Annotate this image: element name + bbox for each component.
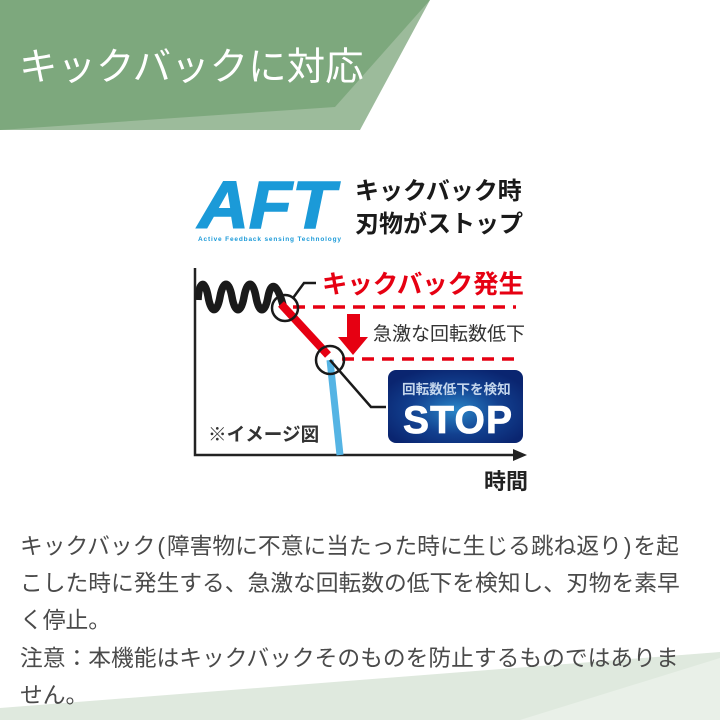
graph axes xyxy=(195,268,527,461)
blue line: blade stop xyxy=(330,360,340,455)
body text: ) xyxy=(624,533,631,559)
down arrow xyxy=(338,314,368,355)
title: キックバックに対応 xyxy=(19,46,364,89)
body text: キックバック 障害物に不意に当たった時に生じる跳ね返り を起 xyxy=(20,533,679,559)
heading: kickback stop: キックバック時 xyxy=(355,178,522,205)
note: image diagram: ※イメージ図 xyxy=(208,424,319,445)
axis label: time: 時間 xyxy=(484,469,528,494)
label: kickback occurs: キックバック発生 xyxy=(322,271,524,299)
dashed threshold lines xyxy=(293,307,522,359)
label: sudden rpm drop: 急激な回転数低下 xyxy=(373,323,525,345)
heading: kickback stop xyxy=(355,178,523,238)
marker circles and leader lines xyxy=(272,283,386,407)
AFT logo: Active Feedback sensing Technology xyxy=(198,236,341,243)
body text: ( xyxy=(157,533,165,559)
waveform: normal rotation xyxy=(198,284,283,310)
body text: せん。 xyxy=(20,682,88,708)
body text: く停止。 xyxy=(20,607,111,633)
stop badge xyxy=(388,370,523,443)
heading: kickback stop: 刃物がストップ xyxy=(355,210,523,238)
AFT logo: AFT xyxy=(196,168,340,243)
body text xyxy=(20,533,680,708)
body text: こした時に発生する、急激な回転数の低下を検知し、刃物を素早 xyxy=(20,570,680,596)
stop badge: 回転数低下を検知 xyxy=(402,381,511,397)
stop badge: STOP xyxy=(403,399,512,442)
red line: rotation drop xyxy=(281,304,328,355)
body text: 注意：本機能はキックバックそのものを防止するものではありま xyxy=(20,645,679,671)
